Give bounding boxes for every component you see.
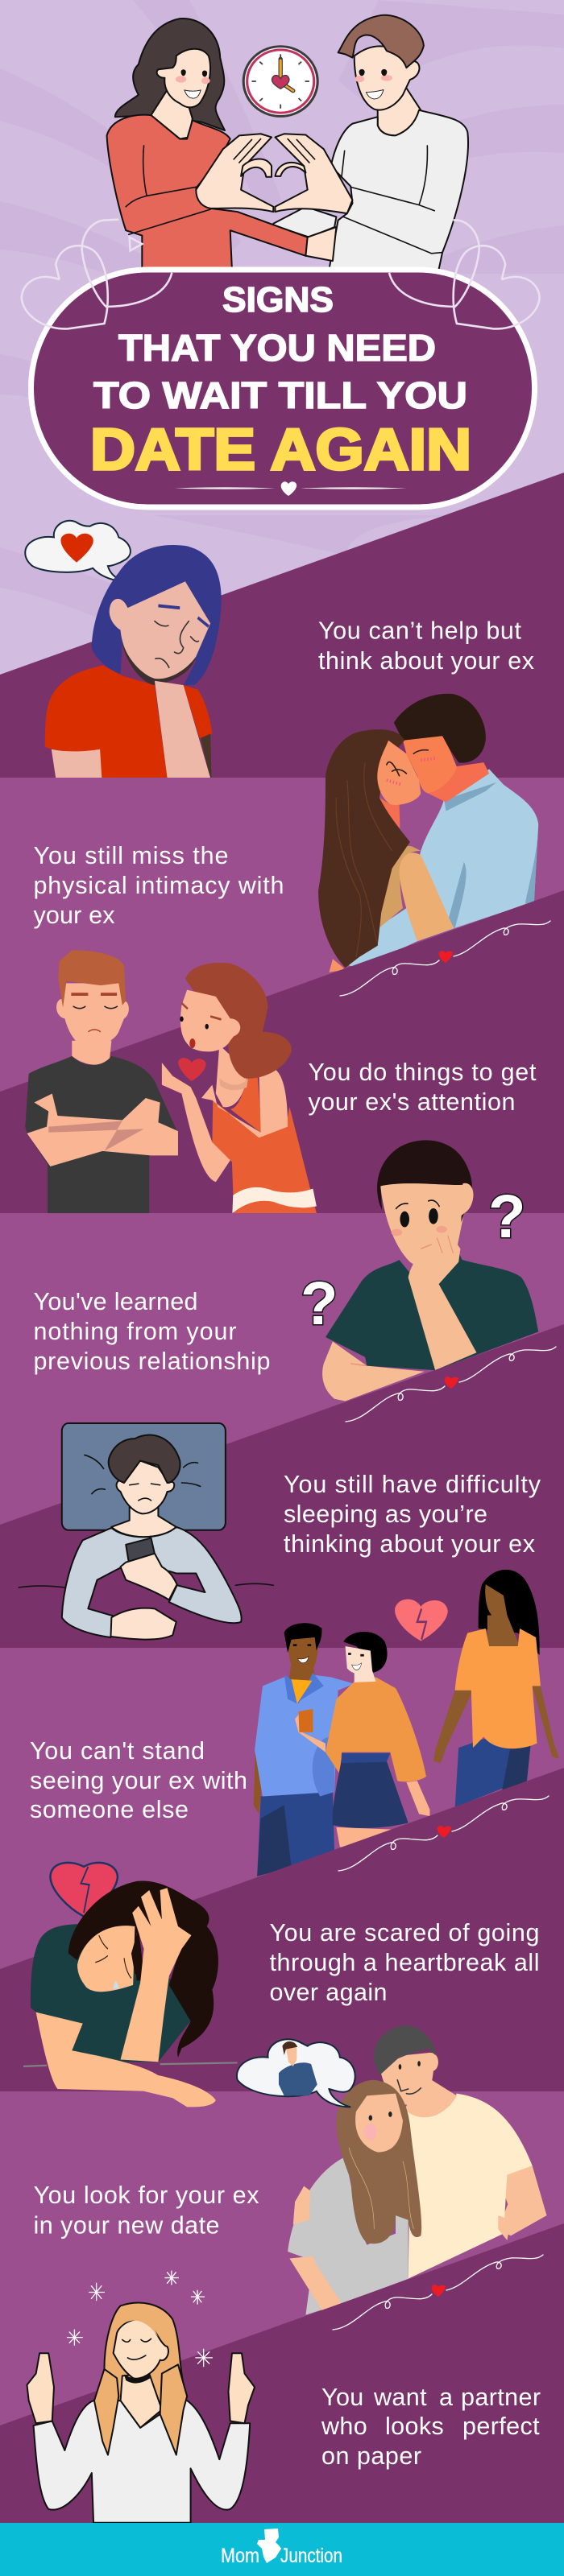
illustration: confused man biting nails [322, 1140, 538, 1402]
text: sign 7: You are scared of going [269, 1919, 540, 1946]
illustration: sleepless man with phone in bed [19, 1423, 273, 1640]
pillow [62, 1423, 226, 1530]
icon: broken heart [50, 1863, 118, 1917]
title text: that you need: THAT YOU NEED [118, 327, 436, 369]
man [273, 15, 468, 270]
decorative squiggle with heart [346, 1347, 556, 1422]
panel band 1: dark diagonal [0, 473, 564, 778]
text: sign 2: You still miss the [34, 842, 229, 869]
panel band 7: dark diagonal [0, 1768, 564, 2091]
decorative squiggle with heart [333, 2255, 543, 2330]
title banner [31, 270, 535, 507]
icon: question mark right: ? [488, 1183, 525, 1251]
woman and man embracing [288, 2025, 547, 2315]
text: sign 4 [34, 1288, 271, 1375]
text: sign 5 [284, 1471, 541, 1558]
panel band 9: dark diagonal [0, 2223, 564, 2523]
text: sign 1: You can’t help but [318, 617, 522, 644]
heart divider [175, 481, 407, 496]
text: sign 9: looks [385, 2413, 444, 2440]
footer logo text: Mom: Mom [221, 2545, 259, 2567]
illustration: couple making a heart with their hands [107, 15, 468, 270]
text: sign 9: want [373, 2384, 427, 2411]
panel band 6: mid purple [0, 1648, 564, 1986]
footer logo icon [257, 2529, 281, 2563]
icon: clock with heart [243, 47, 317, 116]
text: sign 9: You [321, 2384, 364, 2411]
text: sign 5: You still have difficulty [284, 1471, 541, 1498]
man with crossed arms [25, 950, 178, 1213]
ex woman [433, 1570, 559, 1807]
woman [107, 19, 308, 270]
decorative heart outlines [22, 220, 540, 328]
panel band 2: mid purple [0, 778, 564, 1100]
text: sign 7: over again [269, 1979, 387, 2006]
thought bubble with heart [25, 521, 131, 581]
illustration: couple kissing [318, 694, 538, 972]
sparkles [67, 2271, 212, 2367]
footer bar [0, 2523, 564, 2576]
title text: signs: SIGNS [222, 280, 334, 320]
icon: question mark left: ? [301, 1269, 338, 1338]
thought bubble with ex [237, 2039, 355, 2107]
decorative squiggle with heart [340, 921, 550, 996]
footer logo text: Junction: Junction [280, 2545, 342, 2567]
illustration: man ignoring woman offering heart [25, 950, 317, 1213]
woman offering heart [162, 963, 317, 1213]
text: sign 9: partner [461, 2384, 541, 2411]
text: sign 9: perfect [462, 2413, 540, 2440]
text: sign 5: sleeping as you’re [284, 1501, 487, 1528]
illustration: ex with someone else [254, 1570, 559, 1876]
text: sign 7 [269, 1919, 540, 2006]
hands forming a heart [196, 134, 352, 261]
text: sign 8: You look for your ex [34, 2182, 259, 2209]
panel band 4: mid purple [0, 1213, 564, 1535]
text: sign 6: seeing your ex with [30, 1767, 247, 1794]
illustration: hopeful woman with crossed fingers [27, 2271, 255, 2523]
text: sign 3 [308, 1059, 537, 1116]
new partner woman [295, 1632, 429, 1847]
text: sign 7: through a heartbreak all [269, 1949, 540, 1976]
text: sign 1 [318, 617, 534, 675]
text: sign 9: on paper [321, 2442, 421, 2470]
illustration: crying woman with broken heart [23, 1863, 238, 2107]
text: sign 4: You've learned [34, 1288, 198, 1315]
title text: to wait till you: TO WAIT TILL YOU [93, 374, 467, 416]
text: sign 8: in your new date [34, 2212, 219, 2240]
text: sign 6 [30, 1737, 247, 1823]
panel band 5: dark diagonal [0, 1324, 564, 1648]
decorative squiggle with heart [338, 1796, 549, 1871]
text: sign 8 [34, 2182, 259, 2240]
text: sign 1: think about your ex [318, 647, 534, 675]
illustration: sad woman thinking of ex [25, 521, 222, 778]
text: sign 2 [34, 842, 284, 929]
text: sign 3: your ex's attention [308, 1088, 516, 1116]
text: sign 5: thinking about your ex [284, 1530, 535, 1558]
panel band 3: dark diagonal [0, 890, 564, 1213]
text: sign 4: previous relationship [34, 1348, 271, 1375]
text: sign 4: nothing from your [34, 1318, 237, 1345]
text: sign 6: someone else [30, 1796, 189, 1823]
background: light lilac header area [0, 0, 564, 692]
title text: date again: DATE AGAIN [90, 418, 471, 482]
text: sign 9 [321, 2384, 541, 2470]
text: sign 9: who [321, 2413, 367, 2440]
text: sign 2: your ex [34, 902, 114, 929]
text: sign 2: physical intimacy with [34, 872, 284, 899]
text: sign 9: a [439, 2384, 453, 2411]
hand of crying woman on band [144, 2075, 216, 2107]
illustration: couple with thought of ex [237, 2025, 547, 2315]
man in blue shirt [254, 1623, 355, 1876]
text: sign 6: You can't stand [30, 1737, 205, 1765]
icon: broken heart [395, 1600, 448, 1641]
text: sign 3: You do things to get [308, 1059, 537, 1086]
panel band 8: mid purple [0, 2091, 564, 2438]
